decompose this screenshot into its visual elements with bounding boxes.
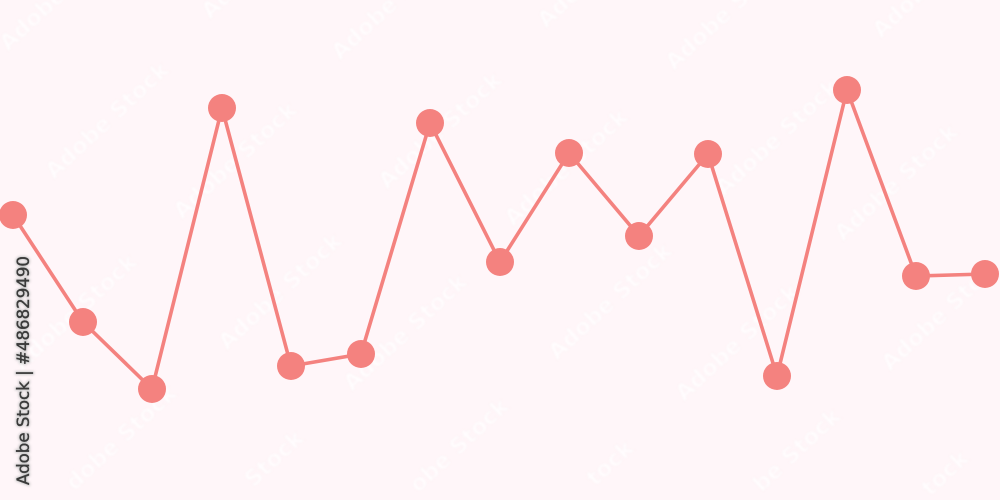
data point markers <box>0 76 999 403</box>
watermark pattern: Adobe Stock <box>213 227 348 355</box>
watermark pattern: Adobe Sto <box>876 268 990 376</box>
watermark pattern: Adobe Stock <box>543 237 678 365</box>
vertical stock credit text: Adobe Stock | #486829490 <box>14 256 34 485</box>
watermark pattern: be Stock <box>748 403 847 497</box>
watermark pattern: Adobe Stock <box>829 118 964 246</box>
watermark pattern: Adobe Stock <box>8 248 143 376</box>
watermark pattern: Adobe Stock <box>373 66 508 194</box>
polyline connecting data points <box>13 90 985 389</box>
watermark pattern: tock <box>916 445 975 500</box>
watermark pattern: Adobe Stock <box>710 73 845 201</box>
watermark pattern: Adobe Stock <box>338 268 473 396</box>
watermark pattern: tock <box>581 435 640 492</box>
vertical stock credit text: Adobe Stock | #486829490 <box>14 256 34 485</box>
watermark pattern: dobe Stock <box>61 380 183 496</box>
watermark pattern: Stock <box>240 425 310 493</box>
watermark pattern: obe Stock <box>405 393 515 498</box>
watermark pattern: Adobe Stock <box>670 278 805 406</box>
watermark pattern: Adobe Stock <box>499 103 634 231</box>
watermark pattern: Adobe Stock <box>168 96 303 224</box>
watermark pattern: Adobe Stock <box>40 56 175 184</box>
